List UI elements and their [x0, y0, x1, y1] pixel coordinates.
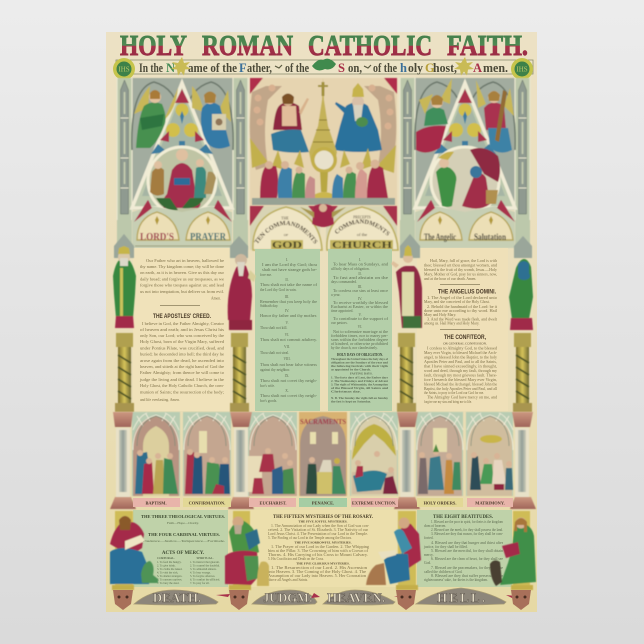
panel: Ten Commandments of God: IX.	[285, 374, 289, 378]
panel: Precepts of the Church: To confess our sins at least once	[333, 289, 388, 293]
text: Confiteor: Mary ever Virgin, to blessed Michael the Arch-	[424, 351, 498, 356]
text: dense holy day lists	[331, 357, 389, 404]
panel: mysteries of the rosary: THE FIFTEEN MYSTERIES OF THE ROSARY.	[273, 515, 373, 520]
panel: Precepts of the Church: IV.	[358, 297, 362, 301]
invocation banner: In the	[139, 61, 163, 75]
text: dense holy day lists: Christmas day.	[331, 390, 361, 394]
invocation banner: oly	[408, 61, 424, 75]
invocation banner: of the	[285, 61, 309, 75]
heading: Ten Commandments of God: THE	[281, 216, 289, 220]
icon: mask two	[229, 590, 249, 610]
panel: Angelic Salutation, Angelus and Confiteor: OR GENERAL CONFESSION.	[443, 342, 487, 346]
seven sacraments row	[110, 412, 536, 509]
panel: virtues: 6. To ransom captives.	[157, 578, 182, 582]
panel: eight beatitudes: dom of heaven.	[424, 524, 446, 528]
panel: virtues: 2. To give drink.	[157, 564, 176, 568]
panel: mysteries of the rosary: him at the Pillar. 3. The Crowning of him with a Crown of	[268, 549, 369, 553]
gothic prayer arches	[132, 200, 515, 252]
panel: virtues: Prudence—Justice—Temperance—Fortitude.	[143, 539, 225, 543]
text: Angelus: 2. Behold the handmaid of the Lord: be it	[427, 305, 497, 309]
text: Angelus	[424, 296, 497, 326]
heading: Lord's Prayer	[132, 200, 232, 248]
sacrament labels: PENANCE.	[312, 500, 334, 506]
text: Confiteor: the Saints, to pray to the Lord our God for me.	[424, 391, 484, 396]
text: Confiteor: angel, to blessed John the Baptist, to the holy	[424, 356, 497, 360]
panel: virtues: 4. To visit the sick.	[157, 572, 178, 574]
invocation banner: A	[473, 61, 482, 75]
panel: mysteries of the rosary: 5. His Crucifixion and Death on the Cross.	[268, 557, 324, 561]
invocation banner: G	[425, 61, 435, 75]
icon: mask three	[396, 590, 416, 610]
panel: Precepts of the Church: of kindred, or otherwise prohibited	[331, 342, 388, 347]
panel: Ten Commandments of God: the Lord thy God in vain.	[260, 288, 297, 292]
panel: Ten Commandments of God: X.	[285, 389, 289, 393]
invocation banner: F	[239, 61, 247, 75]
panel: Precepts of the Church: VI.	[358, 325, 362, 329]
text: Apostles' Creed: Father Almighty; from thence he will come to	[140, 371, 224, 375]
panel: mysteries of the rosary: Lord Jesus Christ. 4. The Presentation of our Lord in the Temple.	[268, 532, 368, 536]
panel: virtues: 1. To instruct the ignorant.	[190, 561, 220, 564]
angel: blue	[192, 86, 231, 149]
panel: mysteries of the rosary: THE FIVE GLORIOUS MYSTERIES.	[296, 562, 350, 566]
text: Apostles' Creed: under Pontius Pilate, was crucified, dead, and	[140, 346, 224, 352]
panel: Precepts of the Church: V.	[358, 313, 362, 317]
panel: Ten Commandments of God: V.	[285, 321, 289, 325]
text: Apostles' Creed: Holy Ghost, the Holy Catholic Church, the com-	[140, 384, 225, 389]
panel: eight beatitudes: justice, for they shall be filled.	[423, 545, 468, 550]
icon: IHS medallion left: IHS	[118, 66, 130, 74]
figure: Christ	[271, 94, 309, 153]
panel: Ten Commandments of God: Thou shalt not covet thy neigh-	[260, 394, 318, 398]
panel: Ten Commandments of God: I am the Lord thy God; thou	[262, 263, 317, 267]
figure: small angel under scene	[300, 204, 346, 227]
pillar: first	[110, 412, 136, 509]
panel: Ten Commandments of God: fore me.	[260, 273, 272, 277]
sacrament labels: BAPTISM.	[145, 500, 167, 506]
panel: virtues: 7. To pray for all.	[190, 582, 210, 585]
panel: Ten Commandments of God: Thou shalt not bear false witness	[260, 363, 318, 367]
text: dense holy day lists: Throughout the United States the holy days of	[331, 357, 389, 361]
column: third gold	[397, 333, 416, 412]
panel: Precepts of the Church: To hear Mass on Sundays, and	[333, 262, 388, 268]
panel: mysteries of the rosary: Assumption of our Lady into Heaven. 5. Her Coronation	[268, 574, 366, 578]
text: Confiteor: word and deed, through my fault, through my	[424, 369, 497, 374]
text: dense holy day lists: the fast is kept on Saturday.	[331, 400, 371, 404]
text: Lord's Prayer: Our Father who art in heaven, hallowed be	[146, 259, 224, 264]
text: dense holy day lists: 2. The Wednesdays and Fridays of Advent	[331, 379, 388, 383]
panel: mysteries of the rosary: 1. The Resurrection of our Lord. 2. His Ascension	[271, 566, 367, 570]
panel: Precepts of the Church	[328, 249, 392, 411]
panel: virtues: 3. To clothe the naked.	[157, 568, 183, 571]
text: Angelus: 3. And the Word was made flesh, and dwelt	[427, 318, 497, 322]
title: FAITH.	[447, 30, 528, 62]
panel: mysteries of the rosary: THE FIVE SORROWFUL MYSTERIES.	[294, 540, 352, 544]
panel: eight beatitudes	[417, 510, 512, 587]
panel: eight beatitudes: 7. Blessed are the peacemakers, for they shall be	[431, 566, 503, 571]
evangelist: Luke	[366, 511, 421, 590]
panel: Ten Commandments of God: Thou shalt not steal.	[260, 351, 289, 355]
label: Sacraments header: SACRAMENTS	[300, 418, 346, 426]
statues and columns	[113, 234, 533, 412]
title	[120, 30, 528, 62]
panel: Lord's Prayer and Creed	[133, 248, 230, 411]
panel: Angelic Salutation, Angelus and Confiteor	[417, 248, 508, 411]
heading: Lord's Prayer: PRAYER	[190, 232, 227, 243]
poster paper	[106, 32, 537, 612]
title: CATHOLIC	[308, 30, 432, 62]
panel: sacrament Matrimony	[466, 412, 513, 496]
panel: Ten Commandments of God: III.	[285, 295, 289, 299]
panel: virtues: 7. To bury the dead.	[157, 582, 180, 585]
panel: Ten Commandments of God: bor's goods.	[260, 399, 277, 403]
text: Apostles' Creed: and life everlasting. Amen.	[140, 398, 180, 402]
panel: Precepts of the Church: by the church, nor clandestinely.	[331, 346, 378, 351]
panel: Precepts of the Church: all holy days of obligation.	[331, 267, 370, 271]
text: Lord's Prayer: daily bread; and forgive us our trespasses, as we	[140, 278, 224, 282]
panel: Ten Commandments of God: VI.	[285, 333, 289, 337]
panel: mysteries of the rosary: 1. The Annunciation of our Lady when the Son of God was con-	[271, 524, 370, 528]
panel: eight beatitudes: 6. Blessed are the clean of heart, for they shall see	[431, 557, 503, 562]
text: dense holy day lists: obligation are the Sundays of the year and	[331, 360, 388, 364]
text: Lord's Prayer: thy name. Thy kingdom come; thy will be done	[140, 265, 224, 269]
panel: Precepts of the Church: To fast and abstain on the	[333, 276, 389, 280]
text: Lord's Prayer	[140, 259, 225, 300]
panel: mysteries of the rosary: 1. The Prayer of our Lord in the Garden. 2. The Whipping	[271, 545, 369, 549]
panel: Ten Commandments of God: IV.	[285, 309, 289, 313]
icon: leaf ornament	[312, 59, 336, 70]
panel: central heaven scene	[250, 78, 397, 206]
statue: robed prophet	[228, 254, 256, 330]
icon: yellow quatrefoil	[166, 104, 198, 137]
pillar: second	[228, 412, 254, 509]
panel: mysteries of the rosary: into Heaven. 3. The Coming of the Holy Ghost. 4. The	[268, 570, 366, 574]
heading: Lord's Prayer: LORD'S	[140, 232, 174, 243]
heading: The Apostles' Creed: THE APOSTLES' CREED.	[153, 314, 211, 320]
icon: gold star right	[454, 57, 474, 76]
text: Confiteor: Apostles Peter and Paul, and to all the Saints,	[424, 360, 497, 365]
invocation banner: host,	[433, 61, 457, 75]
invocation banner: of the	[373, 61, 397, 75]
icon: yellow quatrefoil	[449, 104, 481, 137]
text: Apostles' Creed: I believe in God, the Father Almighty, Creator	[142, 322, 225, 327]
panel: Precepts of the Church: III.	[358, 285, 362, 289]
panel: Ten Commandments of God: I.	[286, 258, 288, 262]
panel: Ten Commandments of God	[255, 249, 320, 411]
panel: Precepts of the Church: Not to solemnize marriage at the	[333, 330, 388, 334]
text: Confiteor: that I have sinned exceedingly, in thought,	[424, 364, 497, 370]
panel: Ten Commandments of God: Sabbath day.	[260, 304, 278, 308]
angel: green and red	[416, 78, 452, 153]
panel: virtues: SPIRITUAL.	[196, 556, 214, 560]
heading: Precepts Commandments of the Church: PRECEPTS	[353, 216, 371, 220]
banner: Death	[134, 590, 218, 605]
text: Angelus: done unto me according to thy word. Hail	[424, 309, 497, 313]
text: Confiteor: Baptist, the holy Apostles Peter and Paul, and all	[424, 387, 497, 392]
panel: virtues: 4. To bear wrongs.	[190, 572, 211, 574]
column: second gold	[230, 333, 249, 412]
panel: virtues: 5. To shelter strangers.	[157, 575, 183, 578]
panel: virtues: CORPORAL.	[157, 556, 175, 560]
text: Apostles' Creed: heaven, and sitteth at the right hand of God the	[140, 365, 224, 370]
heading: Ten Commandments of God: OF	[284, 233, 288, 237]
panel: eight beatitudes: 2. Blessed are the meek, for they shall possess the land.	[431, 528, 503, 533]
text: Hail Mary	[424, 259, 497, 281]
panel: virtues: 3. To admonish sinners.	[190, 568, 217, 571]
panel: sacrament Eucharist	[248, 412, 297, 496]
heading: Angelic Salutation	[415, 200, 515, 248]
text: Apostles' Creed	[139, 322, 225, 402]
panel: mysteries of the rosary: Thorns. 4. His Carrying of his Cross to Mount Calvary.	[268, 553, 368, 557]
panel: mysteries of the rosary: THE FIVE JOYFUL MYSTERIES.	[299, 520, 348, 524]
panel: left triptych	[117, 78, 248, 250]
text: Hail Mary: and at the hour of our death. Amen.	[424, 277, 476, 281]
panel: mysteries of the rosary: above all Angels and Saints.	[268, 578, 308, 582]
angel: green	[134, 86, 178, 148]
panel: virtues: 5. To forgive offences.	[190, 575, 216, 578]
text: Confiteor: fore I beseech the blessed Mary ever Virgin,	[424, 378, 497, 383]
banner: Judgment: JUDGM:	[263, 590, 313, 605]
text: Confiteor: blessed Michael the Archangel, blessed John the	[424, 382, 497, 388]
panel: virtues: 2. To counsel the doubtful.	[190, 564, 220, 568]
invocation banner: h	[400, 61, 407, 75]
text: Apostles' Creed: munion of Saints; the resurrection of the body;	[140, 390, 224, 394]
sacrament labels	[133, 498, 513, 507]
text: Apostles' Creed: buried; he descended into hell; the third day he	[140, 352, 224, 356]
text: dense holy day lists: of the Blessed Virgin, All Saints and	[331, 386, 388, 390]
panel: Precepts of the Church: time appointed.	[331, 309, 353, 313]
icon: mask four	[511, 590, 531, 610]
invocation banner: ather,	[247, 61, 272, 75]
sacrament labels: EUCHARIST.	[260, 500, 286, 506]
panel: eight beatitudes: mercy.	[424, 553, 434, 557]
text: Apostles' Creed: arose again from the dead, he ascended into	[140, 359, 224, 364]
evangelist: John	[490, 511, 536, 590]
text: Apostles' Creed: of heaven and earth; and in Jesus Christ his	[140, 328, 225, 332]
text: dense holy day lists: FASTING DAYS.	[350, 372, 373, 376]
panel: Precepts of the Church: Eucharist at Easter, or within the	[331, 305, 388, 310]
panel: Ten Commandments of God: VIII.	[283, 357, 291, 361]
banner: Hell	[416, 588, 506, 605]
medallion: annunciation	[431, 147, 500, 215]
text: Confiteor: The Almighty God have mercy on me, and	[427, 396, 497, 400]
panel: Ten Commandments of God: II.	[285, 278, 289, 282]
panel: eight beatitudes: 1. Blessed are the poor in spirit, for theirs is the kingdom	[431, 520, 503, 525]
heading: Precepts Commandments of the Church: of the	[357, 232, 367, 237]
panel: Precepts of the Church: sons within the forbidden degree	[331, 338, 388, 342]
panel: sacrament Holy Orders	[416, 412, 463, 496]
banner: Death: DEATH.	[153, 590, 201, 605]
text: dense holy day lists: N. B. The Sunday the vigils fall on Sunday	[331, 396, 389, 400]
text: Hail Mary: thee; blessed art thou amongst women, and	[424, 264, 497, 268]
invocation banner: on,	[348, 61, 362, 75]
title: ROMAN	[202, 30, 293, 62]
text: Lord's Prayer: forgive those who trespass against us; and lead	[140, 284, 224, 288]
banner: Heaven: HEAVEN.	[327, 590, 385, 605]
figures: adoring angels	[250, 138, 396, 198]
panel: Ten Commandments of God: against thy neighbor.	[260, 368, 290, 372]
panel: Ten Commandments of God: VII.	[284, 345, 290, 349]
panel: Precepts of the Church: To contribute to the support of	[333, 317, 389, 321]
panel: Precepts of the Church: To receive worthily the blessed	[333, 301, 388, 305]
text: dense holy day lists: the following festivals with their vigils	[331, 364, 389, 368]
panel: Ten Commandments of God: Thou shalt not take the name of	[260, 283, 318, 287]
column: fourth gold	[513, 333, 532, 412]
panel: Precepts of the Church: II.	[358, 272, 362, 276]
evangelist: Mark	[225, 511, 269, 590]
panel: virtues: 6. To comfort the afflicted.	[190, 578, 220, 582]
text: Lord's Prayer: us not into temptation, but deliver us from evil.	[140, 290, 224, 295]
text: Apostles' Creed: judge the living and the dead. I believe in the	[139, 378, 224, 382]
invocation banner: S	[338, 61, 345, 75]
text: dense holy day lists: 1. The forty days of Lent, the Ember days	[331, 376, 389, 380]
panel: eight beatitudes: God.	[424, 561, 431, 565]
panel: Precepts of the Church: our pastors.	[331, 321, 348, 325]
panel: Precepts of the Church: a year.	[331, 293, 340, 297]
panel: virtues: 1. To feed the hungry.	[157, 561, 182, 564]
statue: pope	[391, 245, 422, 328]
panel: Precepts of the Church: days commanded.	[331, 280, 357, 284]
niche: statue canopies	[114, 234, 532, 258]
heading: Ten Commandments of God: TEN COMMANDMENTS	[254, 220, 318, 244]
sacrament labels: MATRIMONY.	[475, 500, 505, 506]
panel: sacrament Baptism	[132, 412, 180, 496]
banner: Hell: HELL.	[437, 590, 485, 605]
panel: virtues: THE FOUR CARDINAL VIRTUES.	[148, 532, 220, 537]
heading: Precepts Commandments of the Church: CHURCH	[332, 241, 393, 251]
sacrament labels: EXTREME UNCTION.	[352, 500, 396, 506]
panel: virtues: Faith—Hope—Charity.	[167, 521, 199, 525]
heading: The Confiteor: THE CONFITEOR,	[444, 335, 486, 341]
panel: mysteries of the rosary	[250, 510, 397, 587]
panel: Ten Commandments of God: Thou shalt not kill.	[260, 326, 287, 330]
text: Angelus: Mary and Holy Mary.	[424, 313, 456, 317]
panel: Ten Commandments of God: Remember that you keep holy the	[260, 300, 317, 304]
text: dense holy day lists: 3. The vigils of Whitsuntide, the Assumption	[331, 382, 388, 386]
panel: Precepts of the Church: forbidden times, nor to marry per-	[331, 334, 389, 339]
panel: sacrament Penance	[299, 412, 347, 496]
heading: Precepts Commandments of the Church	[325, 205, 400, 252]
panel: Precepts of the Church: I.	[359, 258, 361, 262]
invocation banner	[113, 57, 533, 80]
sacrament labels: CONFIRMATION.	[189, 500, 225, 506]
pillar: third	[394, 412, 420, 509]
text: Hail Mary: blessed is the fruit of thy womb, Jesus.—Holy	[424, 268, 497, 273]
statue: Madonna	[509, 259, 533, 330]
icon: gold star left	[171, 57, 191, 76]
panel: sacrament Confirmation	[183, 412, 231, 496]
panel: eight beatitudes: called the children of God.	[424, 570, 463, 574]
sacrament labels: HOLY ORDERS.	[424, 500, 456, 506]
icon: IHS medallion left	[113, 58, 135, 80]
icon: IHS medallion right	[511, 58, 533, 80]
panel: Ten Commandments of God: Thou shalt not commit adultery.	[260, 338, 317, 342]
panel: virtues	[133, 510, 228, 587]
heading: Angelic Salutation: Salutation	[474, 233, 507, 243]
panel: eight beatitudes: 3. Blessed are they that mourn, for they shall be com-	[431, 532, 504, 537]
statue: green bishop	[113, 246, 136, 328]
invocation banner: men.	[483, 61, 508, 75]
invocation banner: N	[166, 61, 175, 75]
invocation banner: ame of the	[188, 61, 237, 75]
text: dense holy day lists: as appointed by the Church.	[331, 368, 371, 372]
icon: mask one	[113, 590, 133, 610]
text: Confiteor: I confess to Almighty God, to the blessed	[427, 346, 497, 352]
heading: Angelic Salutation: The Angelic	[424, 233, 456, 243]
heading: Ten Commandments of God	[249, 205, 324, 252]
panel: virtues: THE THREE THEOLOGICAL VIRTUES.	[141, 514, 225, 519]
panel: right triptych	[400, 78, 530, 250]
bottom panels	[133, 510, 512, 587]
text: Apostles' Creed: Holy Ghost, born of the Virgin Mary, suffered	[140, 340, 224, 345]
heading: Precepts Commandments of the Church: COMMANDMENTS	[334, 218, 390, 236]
panel: mysteries of the rosary: ceived. 2. The Visitation of St. Elizabeth. 3. The Nativity of our	[268, 528, 369, 532]
panel: eight beatitudes: righteousness' sake, for theirs is the kingdom.	[424, 578, 488, 583]
gothic art panels	[117, 78, 530, 250]
text: Confiteor	[424, 346, 498, 404]
icon: IHS medallion right: IHS	[516, 66, 528, 74]
text: Lord's Prayer: on earth, as it is in heaven. Give us this day our	[140, 271, 225, 276]
panel: eight beatitudes: THE EIGHT BEATITUDES.	[433, 515, 493, 520]
text: Confiteor: fault, through my most grievous fault. There-	[424, 374, 498, 378]
heading: The Angelus Domini: THE ANGELUS DOMINI.	[438, 290, 496, 296]
bottom banners	[113, 588, 531, 610]
panel: sacrament Extreme Unction	[350, 412, 398, 496]
panel: Precepts of the Church: HOLY DAYS OF OBLIGATION.	[337, 353, 383, 357]
text: Hail Mary: Mary, Mother of God, pray for us sinners, now,	[424, 272, 497, 278]
text: Lord's Prayer: Amen.	[211, 296, 221, 300]
text: Angelus: Mary, and she conceived of the Holy Ghost.	[424, 300, 490, 305]
panel: eight beatitudes: forted.	[424, 536, 434, 540]
evangelists	[110, 511, 536, 590]
panel: virtues: ACTS OF MERCY.	[162, 551, 205, 556]
panel: Ten Commandments of God: Thou shalt not covet thy neigh-	[260, 379, 318, 383]
heading: Ten Commandments of God: GOD	[272, 241, 302, 251]
evangelist: Matthew	[110, 511, 158, 590]
angel: red and blue	[476, 80, 514, 153]
medallion: seated Christ	[148, 147, 216, 215]
icon: golden monstrance	[309, 78, 337, 203]
text: Apostles' Creed: only Son, our Lord; who was conceived by the	[140, 334, 224, 339]
title: HOLY	[120, 30, 187, 62]
text: Confiteor: forgive me my sins and bring me to life.	[424, 400, 472, 404]
panel: mysteries of the rosary: 5. The Finding of our Lord in the Temple among the Doctors.	[268, 536, 352, 540]
pillar: fourth	[510, 412, 536, 509]
panel: eight beatitudes: 4. Blessed are they that hunger and thirst after	[431, 541, 504, 545]
column: left gold	[115, 333, 134, 412]
text: Hail Mary: Hail, Mary, full of grace, the Lord is with	[430, 259, 497, 264]
panel: eight beatitudes: 8. Blessed are they that suffer persecution for	[431, 574, 504, 578]
panel: Ten Commandments of God: shalt not have strange gods be-	[262, 268, 318, 272]
figure: God the Father	[334, 83, 382, 152]
panel: eight beatitudes: 5. Blessed are the merciful, for they shall obtain	[431, 549, 503, 554]
text: Angelus: 1. The Angel of the Lord declared unto	[427, 296, 497, 300]
text: Angelus: among us. Hail Mary and Holy Mary.	[424, 322, 480, 326]
icon: ornament dashes	[275, 65, 371, 68]
panel: Ten Commandments of God: bor's wife.	[260, 384, 275, 388]
panel: Ten Commandments of God: Honor thy father and thy mother.	[260, 314, 317, 318]
